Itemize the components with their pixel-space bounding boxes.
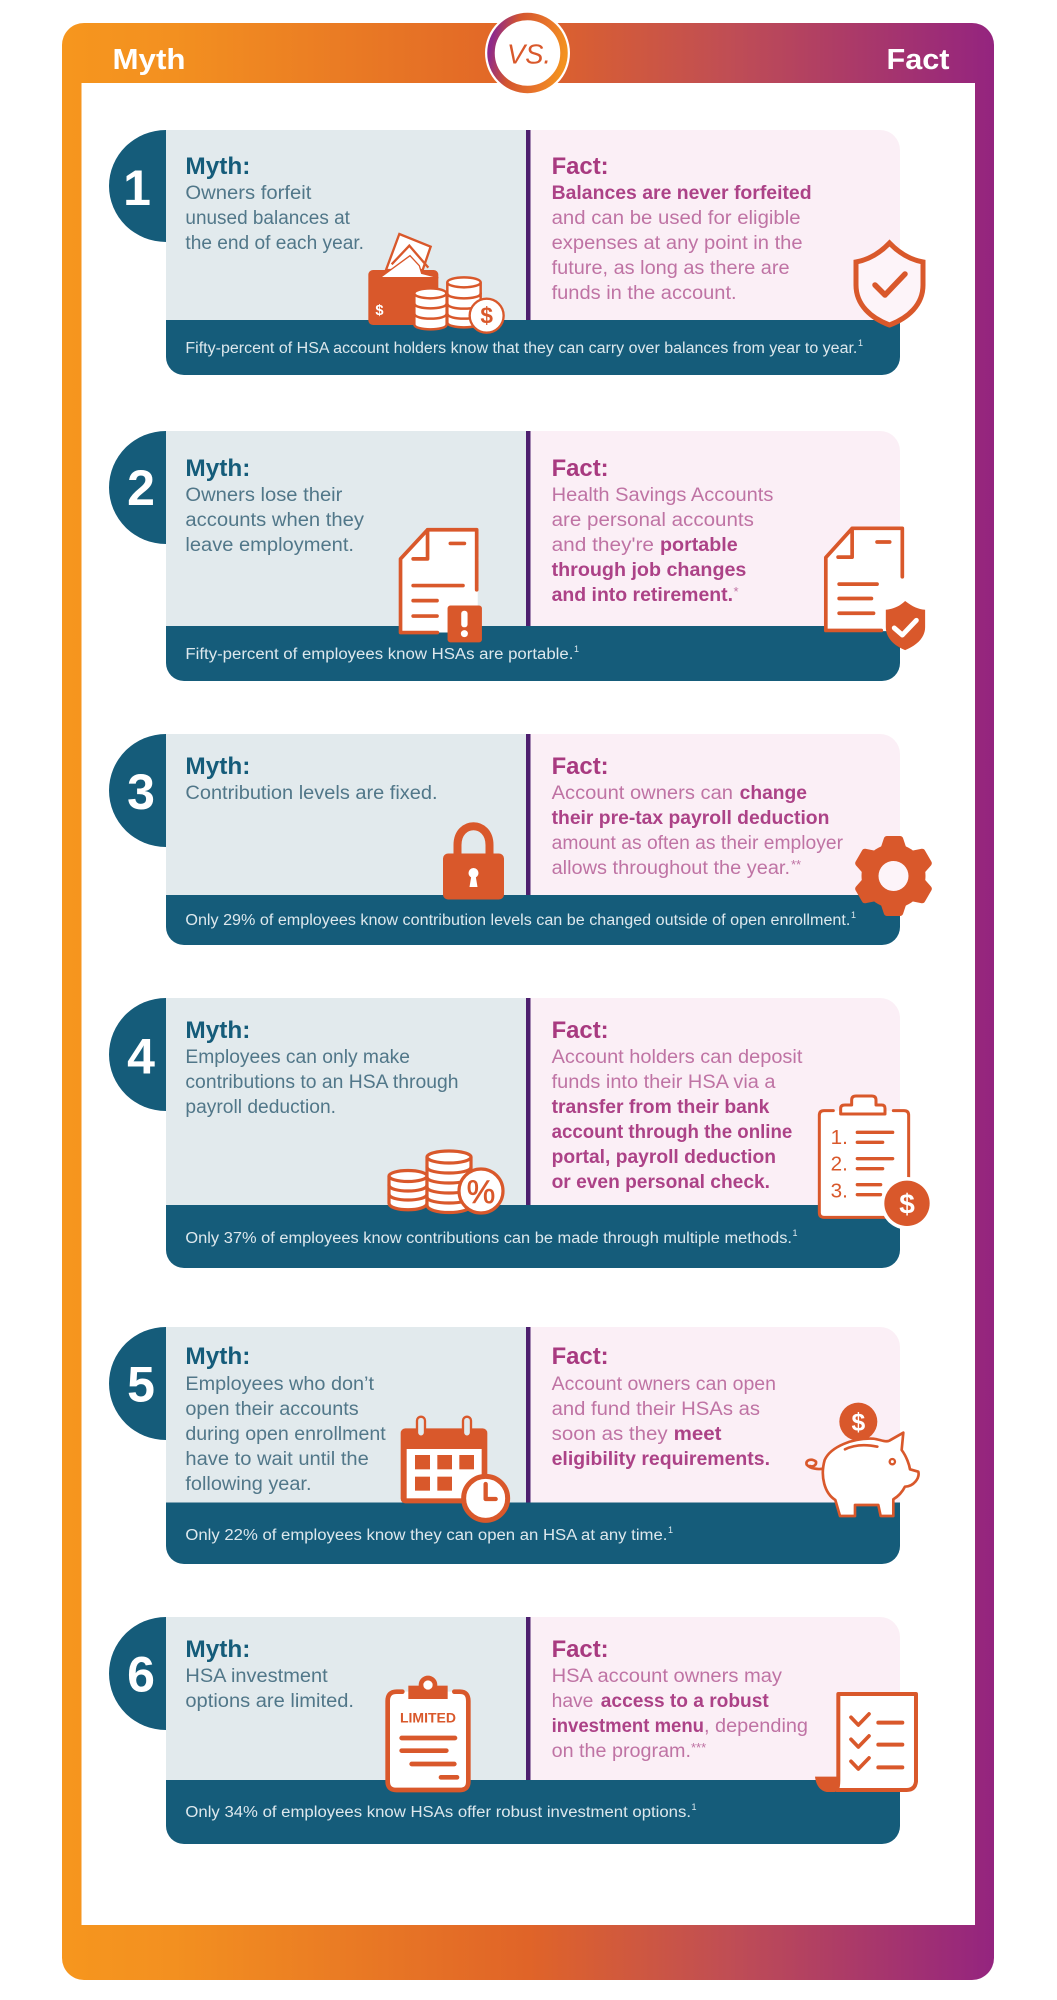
fact text 2: * bbox=[734, 584, 739, 599]
icon: document with alert bbox=[401, 530, 482, 642]
myth text 3: Contribution levels are fixed. bbox=[185, 783, 438, 804]
fact text 1: Fact: bbox=[552, 153, 609, 180]
number tab 2: 2 bbox=[127, 460, 155, 516]
myth panel 3 bbox=[166, 734, 526, 900]
stat stripe 2: Fifty-percent of employees know HSAs are portable. bbox=[185, 646, 573, 663]
fact text 1: future, as long as there are bbox=[552, 258, 790, 279]
myth text 3: Myth: bbox=[185, 753, 250, 780]
stat stripe 6: Only 34% of employees know HSAs offer robust investment options. bbox=[185, 1804, 691, 1821]
fact panel 3 bbox=[530, 734, 900, 900]
fact text 2: portable bbox=[660, 535, 738, 556]
icon: padlock bbox=[443, 826, 504, 900]
fact text 4: Fact: bbox=[552, 1017, 609, 1044]
stat stripe 3 bbox=[166, 895, 900, 945]
fact text 4: portal, payroll deduction bbox=[552, 1147, 776, 1168]
myth text 5: during open enrollment bbox=[185, 1424, 386, 1445]
myth panel 2 bbox=[166, 431, 526, 631]
number tab 6 bbox=[109, 1617, 166, 1730]
icon: numbered clipboard with dollar: $ bbox=[899, 1188, 915, 1219]
myth text 6 bbox=[185, 1636, 354, 1712]
card 6 bbox=[109, 1617, 916, 1844]
myth text 2 bbox=[185, 455, 365, 556]
stat stripe 3: 1 bbox=[851, 910, 856, 920]
fact text 3: Fact: bbox=[552, 753, 609, 780]
icon: coin stacks with percent: % bbox=[467, 1174, 495, 1210]
number tab 5: 5 bbox=[127, 1356, 155, 1412]
fact text 2: Health Savings Accounts bbox=[552, 485, 773, 506]
myth text 2: accounts when they bbox=[185, 510, 365, 531]
fact panel 6 bbox=[530, 1617, 900, 1785]
myth text 4: payroll deduction. bbox=[185, 1097, 336, 1118]
fact text 1: expenses at any point in the bbox=[552, 233, 803, 254]
number tab 4 bbox=[109, 998, 166, 1111]
fact text 5: soon as they bbox=[552, 1424, 668, 1445]
fact text 3: ** bbox=[791, 857, 801, 872]
fact text 6: , depending bbox=[704, 1716, 808, 1737]
fact text 5: Fact: bbox=[552, 1343, 609, 1370]
icon: shield with check bbox=[856, 243, 923, 325]
myth text 4: Myth: bbox=[185, 1017, 250, 1044]
fact text 4: transfer from their bank bbox=[552, 1097, 770, 1118]
fact text 2 bbox=[552, 455, 773, 606]
fact text 1: and can be used for eligible bbox=[552, 208, 801, 229]
myth text 1: unused balances at bbox=[185, 208, 351, 229]
fact text 6 bbox=[552, 1636, 808, 1762]
fact panel 4 bbox=[530, 998, 900, 1210]
fact text 4: account through the online bbox=[552, 1122, 792, 1143]
fact panel 1 bbox=[530, 130, 900, 325]
card 3 bbox=[109, 734, 935, 945]
stat stripe 6 bbox=[166, 1780, 900, 1844]
fact text 4: funds into their HSA via a bbox=[552, 1072, 776, 1093]
stat stripe 3: Only 29% of employees know contribution levels can be changed outside of open enrollment. bbox=[185, 912, 850, 929]
icon: wallet and coins bbox=[368, 234, 504, 333]
fact panel 2 bbox=[530, 431, 900, 631]
divider 5 bbox=[526, 1327, 530, 1504]
fact text 6: HSA account owners may bbox=[552, 1666, 783, 1687]
myth text 2: Myth: bbox=[185, 455, 250, 482]
number tab 4: 4 bbox=[127, 1028, 155, 1084]
fact text 3: amount as often as their employer bbox=[552, 833, 844, 854]
divider 2 bbox=[526, 431, 530, 628]
icon: wallet and coins: $ bbox=[480, 303, 493, 329]
myth text 5: open their accounts bbox=[185, 1399, 359, 1420]
fact text 3: Account owners can bbox=[552, 783, 733, 804]
heading: Fact: Fact bbox=[886, 44, 950, 76]
myth panel 5 bbox=[166, 1327, 526, 1507]
icon: coin stacks with percent bbox=[389, 1151, 503, 1213]
number tab 2 bbox=[109, 431, 166, 544]
icon: gear bbox=[852, 836, 935, 916]
stat stripe 2: 1 bbox=[574, 644, 579, 654]
icon: piggy bank with coin bbox=[806, 1403, 919, 1516]
stat stripe 1: 1 bbox=[858, 338, 863, 348]
number tab 3: 3 bbox=[127, 764, 155, 820]
fact text 6: investment menu bbox=[552, 1716, 704, 1737]
icon: wallet and coins: $ bbox=[375, 303, 383, 319]
stat stripe 4 bbox=[166, 1205, 900, 1268]
number tab 1 bbox=[109, 130, 166, 242]
myth text 4: Employees can only make bbox=[185, 1047, 410, 1068]
myth text 5: have to wait until the bbox=[185, 1449, 369, 1470]
myth text 5: following year. bbox=[185, 1474, 312, 1495]
fact text 6: on the program. bbox=[552, 1741, 691, 1762]
card 2 bbox=[109, 431, 925, 681]
fact text 3: allows throughout the year. bbox=[552, 858, 790, 879]
myth panel 6 bbox=[166, 1617, 526, 1785]
number tab 1: 1 bbox=[123, 160, 151, 216]
icon: checklist scroll bbox=[815, 1694, 916, 1792]
icon: document with shield bbox=[825, 528, 925, 650]
fact text 2: and into retirement. bbox=[552, 585, 733, 606]
myth text 1: Myth: bbox=[185, 153, 250, 180]
stat stripe 1: Fifty-percent of HSA account holders know that they can carry over balances from year to year. bbox=[185, 340, 857, 357]
divider 6 bbox=[526, 1617, 530, 1782]
number tab 3 bbox=[109, 734, 166, 847]
fact text 4: or even personal check. bbox=[552, 1172, 770, 1193]
fact text 5: meet bbox=[674, 1424, 722, 1445]
fact text 1 bbox=[552, 153, 812, 304]
myth panel 4 bbox=[166, 998, 526, 1210]
stat stripe 4: 1 bbox=[792, 1228, 798, 1238]
myth text 5: Employees who don’t bbox=[185, 1374, 375, 1395]
myth text 4: contributions to an HSA through bbox=[185, 1072, 458, 1093]
divider 4 bbox=[526, 998, 530, 1207]
myth text 6: options are limited. bbox=[185, 1691, 354, 1712]
heading: Myth: Myth bbox=[112, 44, 186, 76]
icon: calendar with clock bbox=[401, 1417, 508, 1520]
icon: numbered clipboard with dollar: 1. bbox=[831, 1126, 848, 1149]
myth panel 1 bbox=[166, 130, 526, 325]
fact text 1: funds in the account. bbox=[552, 283, 737, 304]
icon: piggy bank with coin: $ bbox=[851, 1410, 865, 1437]
VS badge: VS. bbox=[507, 38, 551, 70]
number tab 5 bbox=[109, 1327, 166, 1440]
myth text 2: leave employment. bbox=[185, 535, 354, 556]
myth text 2: Owners lose their bbox=[185, 485, 343, 506]
fact text 3: change bbox=[740, 783, 807, 804]
fact text 6: have bbox=[552, 1691, 593, 1712]
fact text 6: *** bbox=[691, 1740, 706, 1755]
divider 3 bbox=[526, 734, 530, 897]
myth text 6: HSA investment bbox=[185, 1666, 328, 1687]
fact text 5: and fund their HSAs as bbox=[552, 1399, 760, 1420]
number tab 6: 6 bbox=[127, 1646, 155, 1702]
myth text 3 bbox=[185, 753, 438, 804]
stat stripe 4: Only 37% of employees know contributions can be made through multiple methods. bbox=[185, 1230, 792, 1247]
icon: numbered clipboard with dollar: 2. bbox=[831, 1153, 848, 1176]
fact text 3: their pre-tax payroll deduction bbox=[552, 808, 829, 829]
fact text 2: Fact: bbox=[552, 455, 609, 482]
myth text 6: Myth: bbox=[185, 1636, 250, 1663]
myth text 4 bbox=[185, 1017, 458, 1118]
divider 1 bbox=[526, 130, 530, 322]
stat stripe 1 bbox=[166, 320, 900, 375]
fact text 6: access to a robust bbox=[601, 1691, 769, 1712]
fact panel 5 bbox=[530, 1327, 900, 1507]
fact text 5 bbox=[552, 1343, 776, 1470]
myth text 1: Owners forfeit bbox=[185, 183, 312, 204]
icon: numbered clipboard with dollar: 3. bbox=[831, 1179, 848, 1202]
stat stripe 6: 1 bbox=[692, 1802, 697, 1812]
stat stripe 5 bbox=[166, 1502, 900, 1564]
fact text 5: Account owners can open bbox=[552, 1374, 776, 1395]
fact text 2: are personal accounts bbox=[552, 510, 754, 531]
stat stripe 5: Only 22% of employees know they can open an HSA at any time. bbox=[185, 1527, 667, 1544]
fact text 3 bbox=[552, 753, 844, 879]
fact text 4 bbox=[552, 1017, 803, 1193]
card 1 bbox=[109, 130, 923, 375]
stat stripe 2 bbox=[166, 626, 900, 681]
fact text 2: through job changes bbox=[552, 560, 746, 581]
fact text 1: Balances are never forfeited bbox=[552, 183, 812, 204]
myth text 5 bbox=[185, 1343, 386, 1495]
fact text 2: and they're bbox=[552, 535, 654, 556]
icon: numbered clipboard with dollar bbox=[819, 1096, 933, 1230]
VS badge bbox=[485, 10, 570, 96]
fact text 5: eligibility requirements. bbox=[552, 1449, 770, 1470]
card 5 bbox=[109, 1327, 919, 1564]
card 4 bbox=[109, 998, 933, 1268]
icon: clipboard marked limited: LIMITED bbox=[400, 1710, 456, 1726]
icon: clipboard marked limited bbox=[388, 1676, 468, 1790]
stat stripe 5: 1 bbox=[668, 1525, 673, 1535]
myth text 1 bbox=[185, 153, 364, 254]
fact text 4: Account holders can deposit bbox=[552, 1047, 803, 1068]
fact text 6: Fact: bbox=[552, 1636, 609, 1663]
myth text 5: Myth: bbox=[185, 1343, 250, 1370]
myth text 1: the end of each year. bbox=[185, 233, 364, 254]
